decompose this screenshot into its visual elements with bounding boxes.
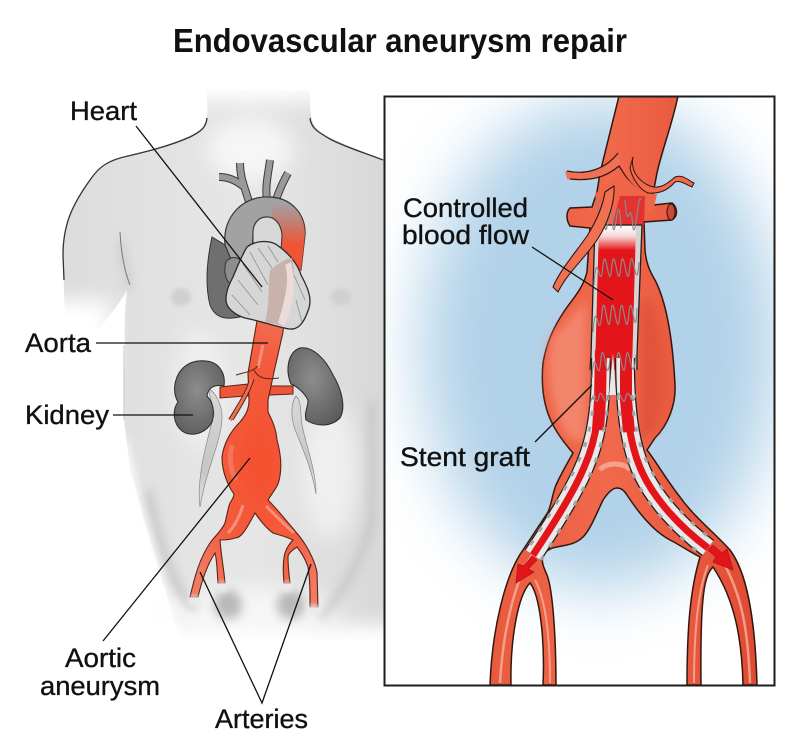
torso silhouette xyxy=(63,90,384,640)
leader line: aortic aneurysm xyxy=(103,458,250,641)
blood flow arrow right xyxy=(708,545,733,570)
leader line: kidney xyxy=(113,414,193,416)
label: aortic aneurysm: Aortic xyxy=(65,643,136,673)
leader lines: arteries xyxy=(200,564,311,703)
artery highlights xyxy=(500,464,750,683)
branch vessels at top xyxy=(565,153,694,212)
leader line: controlled blood flow xyxy=(532,247,613,300)
crossing artery xyxy=(553,186,614,292)
kidney left xyxy=(174,361,224,434)
label: aortic aneurysm: aneurysm xyxy=(40,671,160,701)
label: kidney: Kidney xyxy=(25,400,110,430)
shoulder and arm outlines xyxy=(63,118,383,420)
label: controlled blood flow: Controlled xyxy=(403,193,528,223)
label: aortic aneurysm xyxy=(40,643,160,701)
renal arteries xyxy=(220,384,293,398)
leader line: heart xyxy=(136,126,262,287)
label: stent graft: Stent graft xyxy=(400,442,531,472)
kidneys and ureters xyxy=(174,348,343,507)
aortic arch and branches xyxy=(219,160,305,270)
graft top red section xyxy=(612,196,645,226)
aneurysm sac shading xyxy=(548,300,663,440)
renal branch vessels xyxy=(229,366,279,420)
aorta and aneurysm (body view) xyxy=(187,315,321,615)
title: Endovascular aneurysm repair xyxy=(173,22,627,59)
artery highlights xyxy=(228,345,294,533)
ureters xyxy=(199,389,222,507)
leader line: aorta xyxy=(96,342,268,344)
stent graft body xyxy=(527,198,714,560)
label: heart: Heart xyxy=(70,96,137,126)
stent wire rings xyxy=(590,198,641,406)
leader line: stent graft xyxy=(535,385,592,442)
abdominal aorta with aneurysm and iliac arteries xyxy=(190,315,318,607)
kidney right xyxy=(288,348,343,425)
heart xyxy=(207,237,310,329)
label: arteries: Arteries xyxy=(215,704,308,734)
nipples xyxy=(171,288,352,306)
panel: body illustration xyxy=(63,90,384,640)
upper aorta, aneurysm sac and iliac arteries xyxy=(490,96,757,685)
graft limbs xyxy=(527,350,714,560)
renal artery opening xyxy=(667,204,675,220)
blood flow arrow left xyxy=(516,556,537,583)
panel: detail frame xyxy=(384,96,780,686)
label: controlled blood flow xyxy=(402,193,530,250)
label: controlled blood flow: blood flow xyxy=(402,220,530,250)
blue background glow xyxy=(420,100,780,590)
label: aorta: Aorta xyxy=(25,328,92,358)
faded artery ends xyxy=(187,582,321,615)
